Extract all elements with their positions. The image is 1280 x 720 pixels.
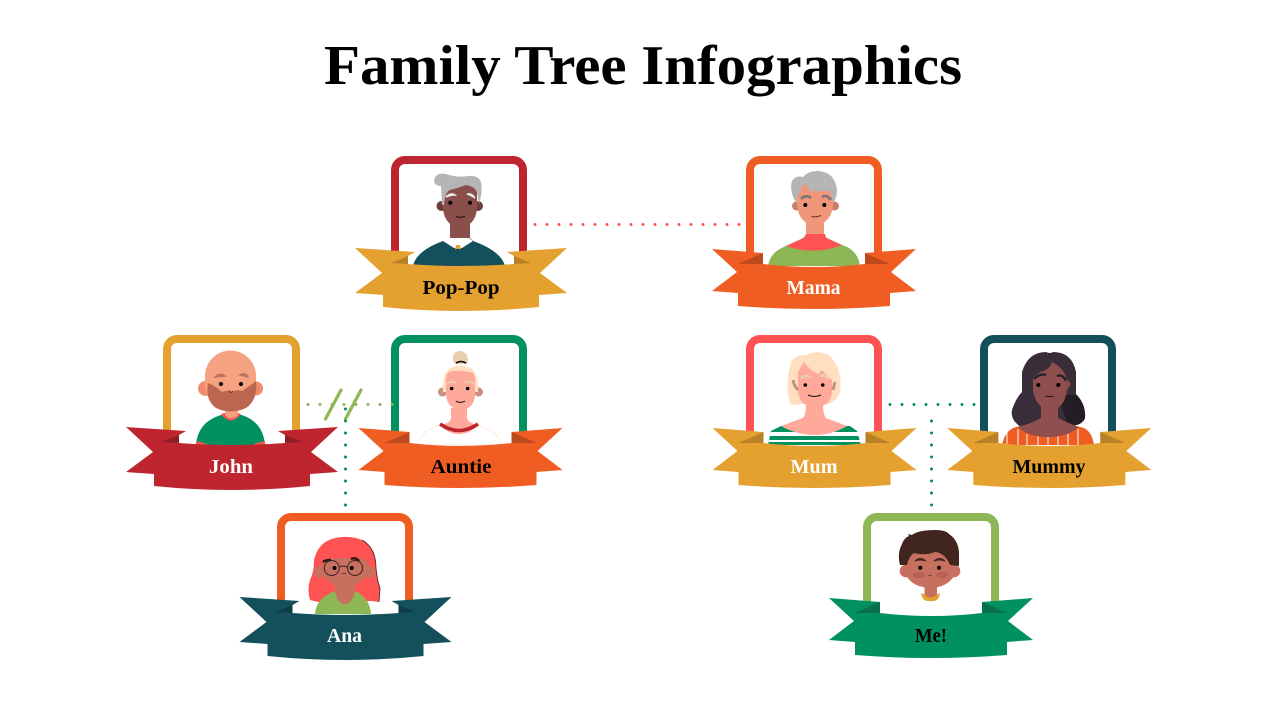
portrait: Pop-Pop bbox=[413, 174, 505, 266]
connector: Pop-Pop to Mama bbox=[535, 223, 740, 226]
portrait: Mummy bbox=[1002, 352, 1094, 445]
label: Mummy: Mummy bbox=[1012, 456, 1086, 478]
ribbon: Me bbox=[829, 598, 1033, 658]
portrait: Auntie bbox=[418, 351, 501, 445]
ribbon: Ana bbox=[240, 597, 452, 660]
connector: parents to Me bbox=[930, 421, 933, 506]
title: Family Tree Infographics bbox=[324, 35, 962, 97]
ribbon: Auntie bbox=[358, 428, 562, 488]
frames bbox=[167, 160, 1112, 610]
portrait: Mama bbox=[768, 171, 860, 266]
portrait: Me bbox=[899, 530, 960, 601]
ribbon: Mummy bbox=[947, 428, 1151, 488]
portrait: Ana bbox=[308, 537, 380, 614]
portrait: John bbox=[196, 350, 265, 445]
label: Pop-Pop: Pop-Pop bbox=[422, 277, 500, 299]
connector: Mum to Mummy bbox=[890, 403, 975, 406]
ribbon: Mum bbox=[712, 428, 916, 488]
label: Me!: Me! bbox=[915, 625, 947, 647]
ribbon: Pop-Pop bbox=[355, 248, 567, 311]
label: Mama: Mama bbox=[786, 277, 840, 299]
ribbon: Mama bbox=[712, 249, 916, 309]
connector: John to Ana bbox=[344, 409, 347, 506]
label: Auntie: Auntie bbox=[430, 456, 492, 478]
portrait: Mum bbox=[768, 352, 861, 445]
ribbon: John bbox=[126, 427, 338, 490]
label: Ana: Ana bbox=[327, 625, 362, 647]
label: Mum: Mum bbox=[790, 456, 838, 478]
connector: John and Auntie divorced bbox=[308, 390, 393, 419]
label: John: John bbox=[209, 456, 253, 478]
